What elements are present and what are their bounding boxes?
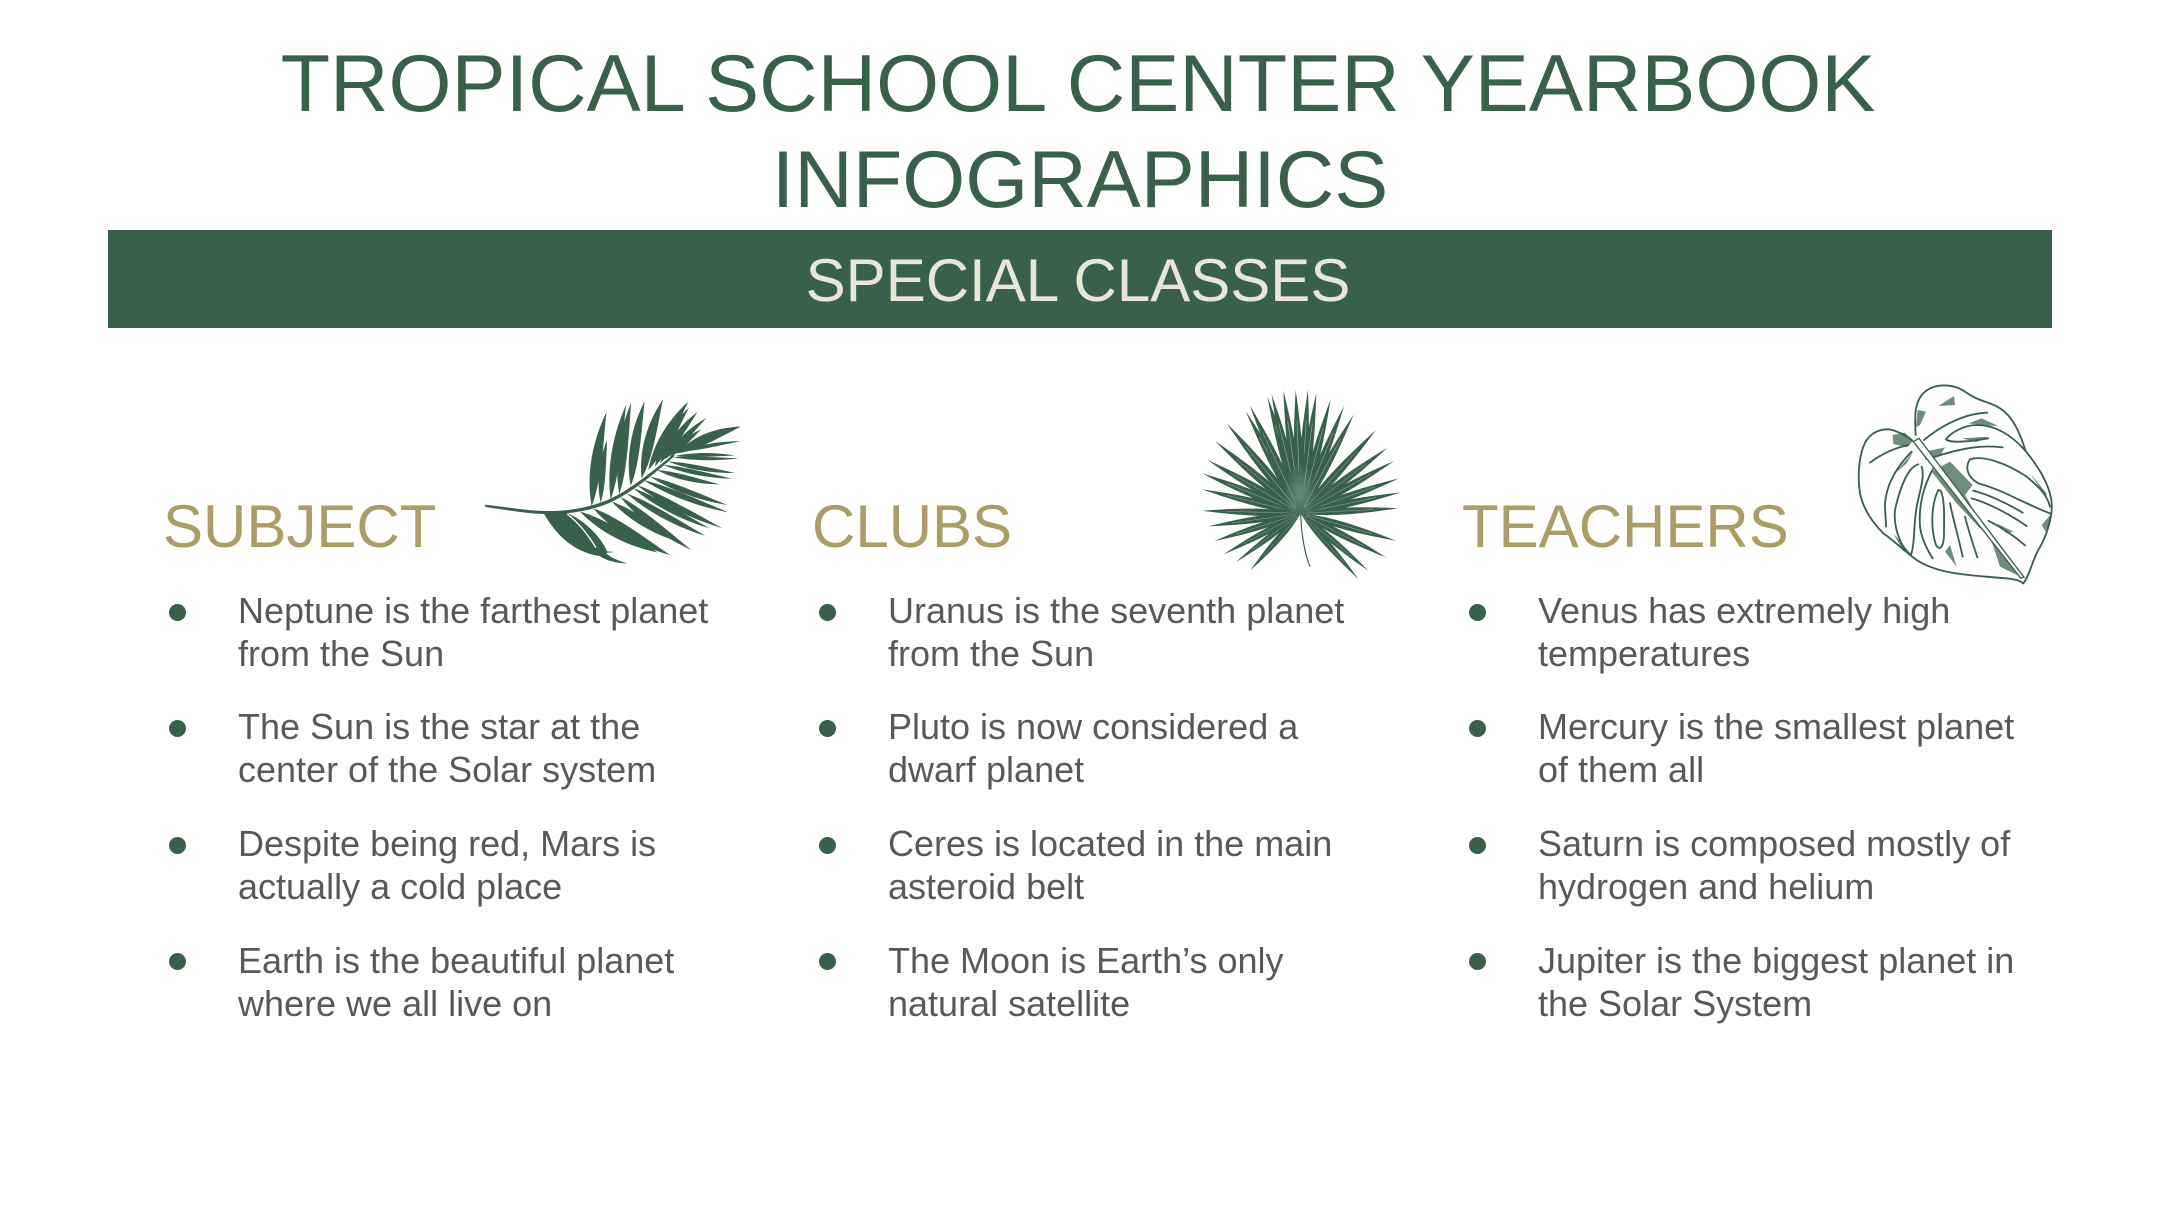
- bullet list: subject: where we all live on: [238, 983, 552, 1024]
- bullet list: teachers: temperatures: [1538, 633, 1750, 674]
- bullet list: teachers: Jupiter is the biggest planet in: [1538, 940, 2014, 981]
- bullet list: teachers: of them all: [1538, 749, 1704, 790]
- title: [281, 39, 1875, 225]
- banner: special classes: SPECIAL CLASSES: [806, 247, 1350, 314]
- bullet list: subject: Despite being red, Mars is: [238, 823, 656, 864]
- bullet list: clubs: The Moon is Earth’s only: [888, 940, 1284, 981]
- icon: fan palm: [1201, 390, 1402, 581]
- bullet list: teachers: the Solar System: [1538, 983, 1812, 1024]
- panel: teachers: [1462, 493, 2014, 1024]
- title: TROPICAL SCHOOL CENTER YEARBOOK: [281, 39, 1875, 129]
- heading: teachers: TEACHERS: [1462, 493, 1789, 560]
- bullet list: subject: The Sun is the star at the: [238, 706, 640, 747]
- bullet list: clubs: Uranus is the seventh planet: [888, 590, 1344, 631]
- bullet list: clubs: Ceres is located in the main: [888, 823, 1332, 864]
- bullet list: clubs: Pluto is now considered a: [888, 706, 1298, 747]
- bullet list: clubs: [819, 590, 1344, 1024]
- title: INFOGRAPHICS: [772, 135, 1388, 225]
- bullet list: teachers: Saturn is composed mostly of: [1538, 823, 2010, 864]
- bullet list: subject: [169, 590, 708, 1024]
- banner: special classes: [108, 230, 2052, 328]
- bullet list: clubs: from the Sun: [888, 633, 1094, 674]
- panel: clubs: [812, 493, 1344, 1024]
- icon: palm frond: [485, 397, 741, 563]
- bullet list: teachers: Mercury is the smallest planet: [1538, 706, 2014, 747]
- icon: monstera leaf: [1859, 385, 2052, 583]
- bullet list: subject: Earth is the beautiful planet: [238, 940, 674, 981]
- bullet list: clubs: asteroid belt: [888, 866, 1084, 907]
- bullet list: subject: center of the Solar system: [238, 749, 656, 790]
- bullet list: teachers: [1469, 590, 2014, 1024]
- bullet list: clubs: dwarf planet: [888, 749, 1084, 790]
- panel: subject: [163, 493, 708, 1024]
- bullet list: subject: Neptune is the farthest planet: [238, 590, 708, 631]
- bullet list: clubs: natural satellite: [888, 983, 1130, 1024]
- bullet list: subject: actually a cold place: [238, 866, 562, 907]
- heading: clubs: CLUBS: [812, 493, 1012, 560]
- bullet list: subject: from the Sun: [238, 633, 444, 674]
- bullet list: teachers: Venus has extremely high: [1538, 590, 1950, 631]
- bullet list: teachers: hydrogen and helium: [1538, 866, 1874, 907]
- heading: subject: SUBJECT: [163, 493, 436, 560]
